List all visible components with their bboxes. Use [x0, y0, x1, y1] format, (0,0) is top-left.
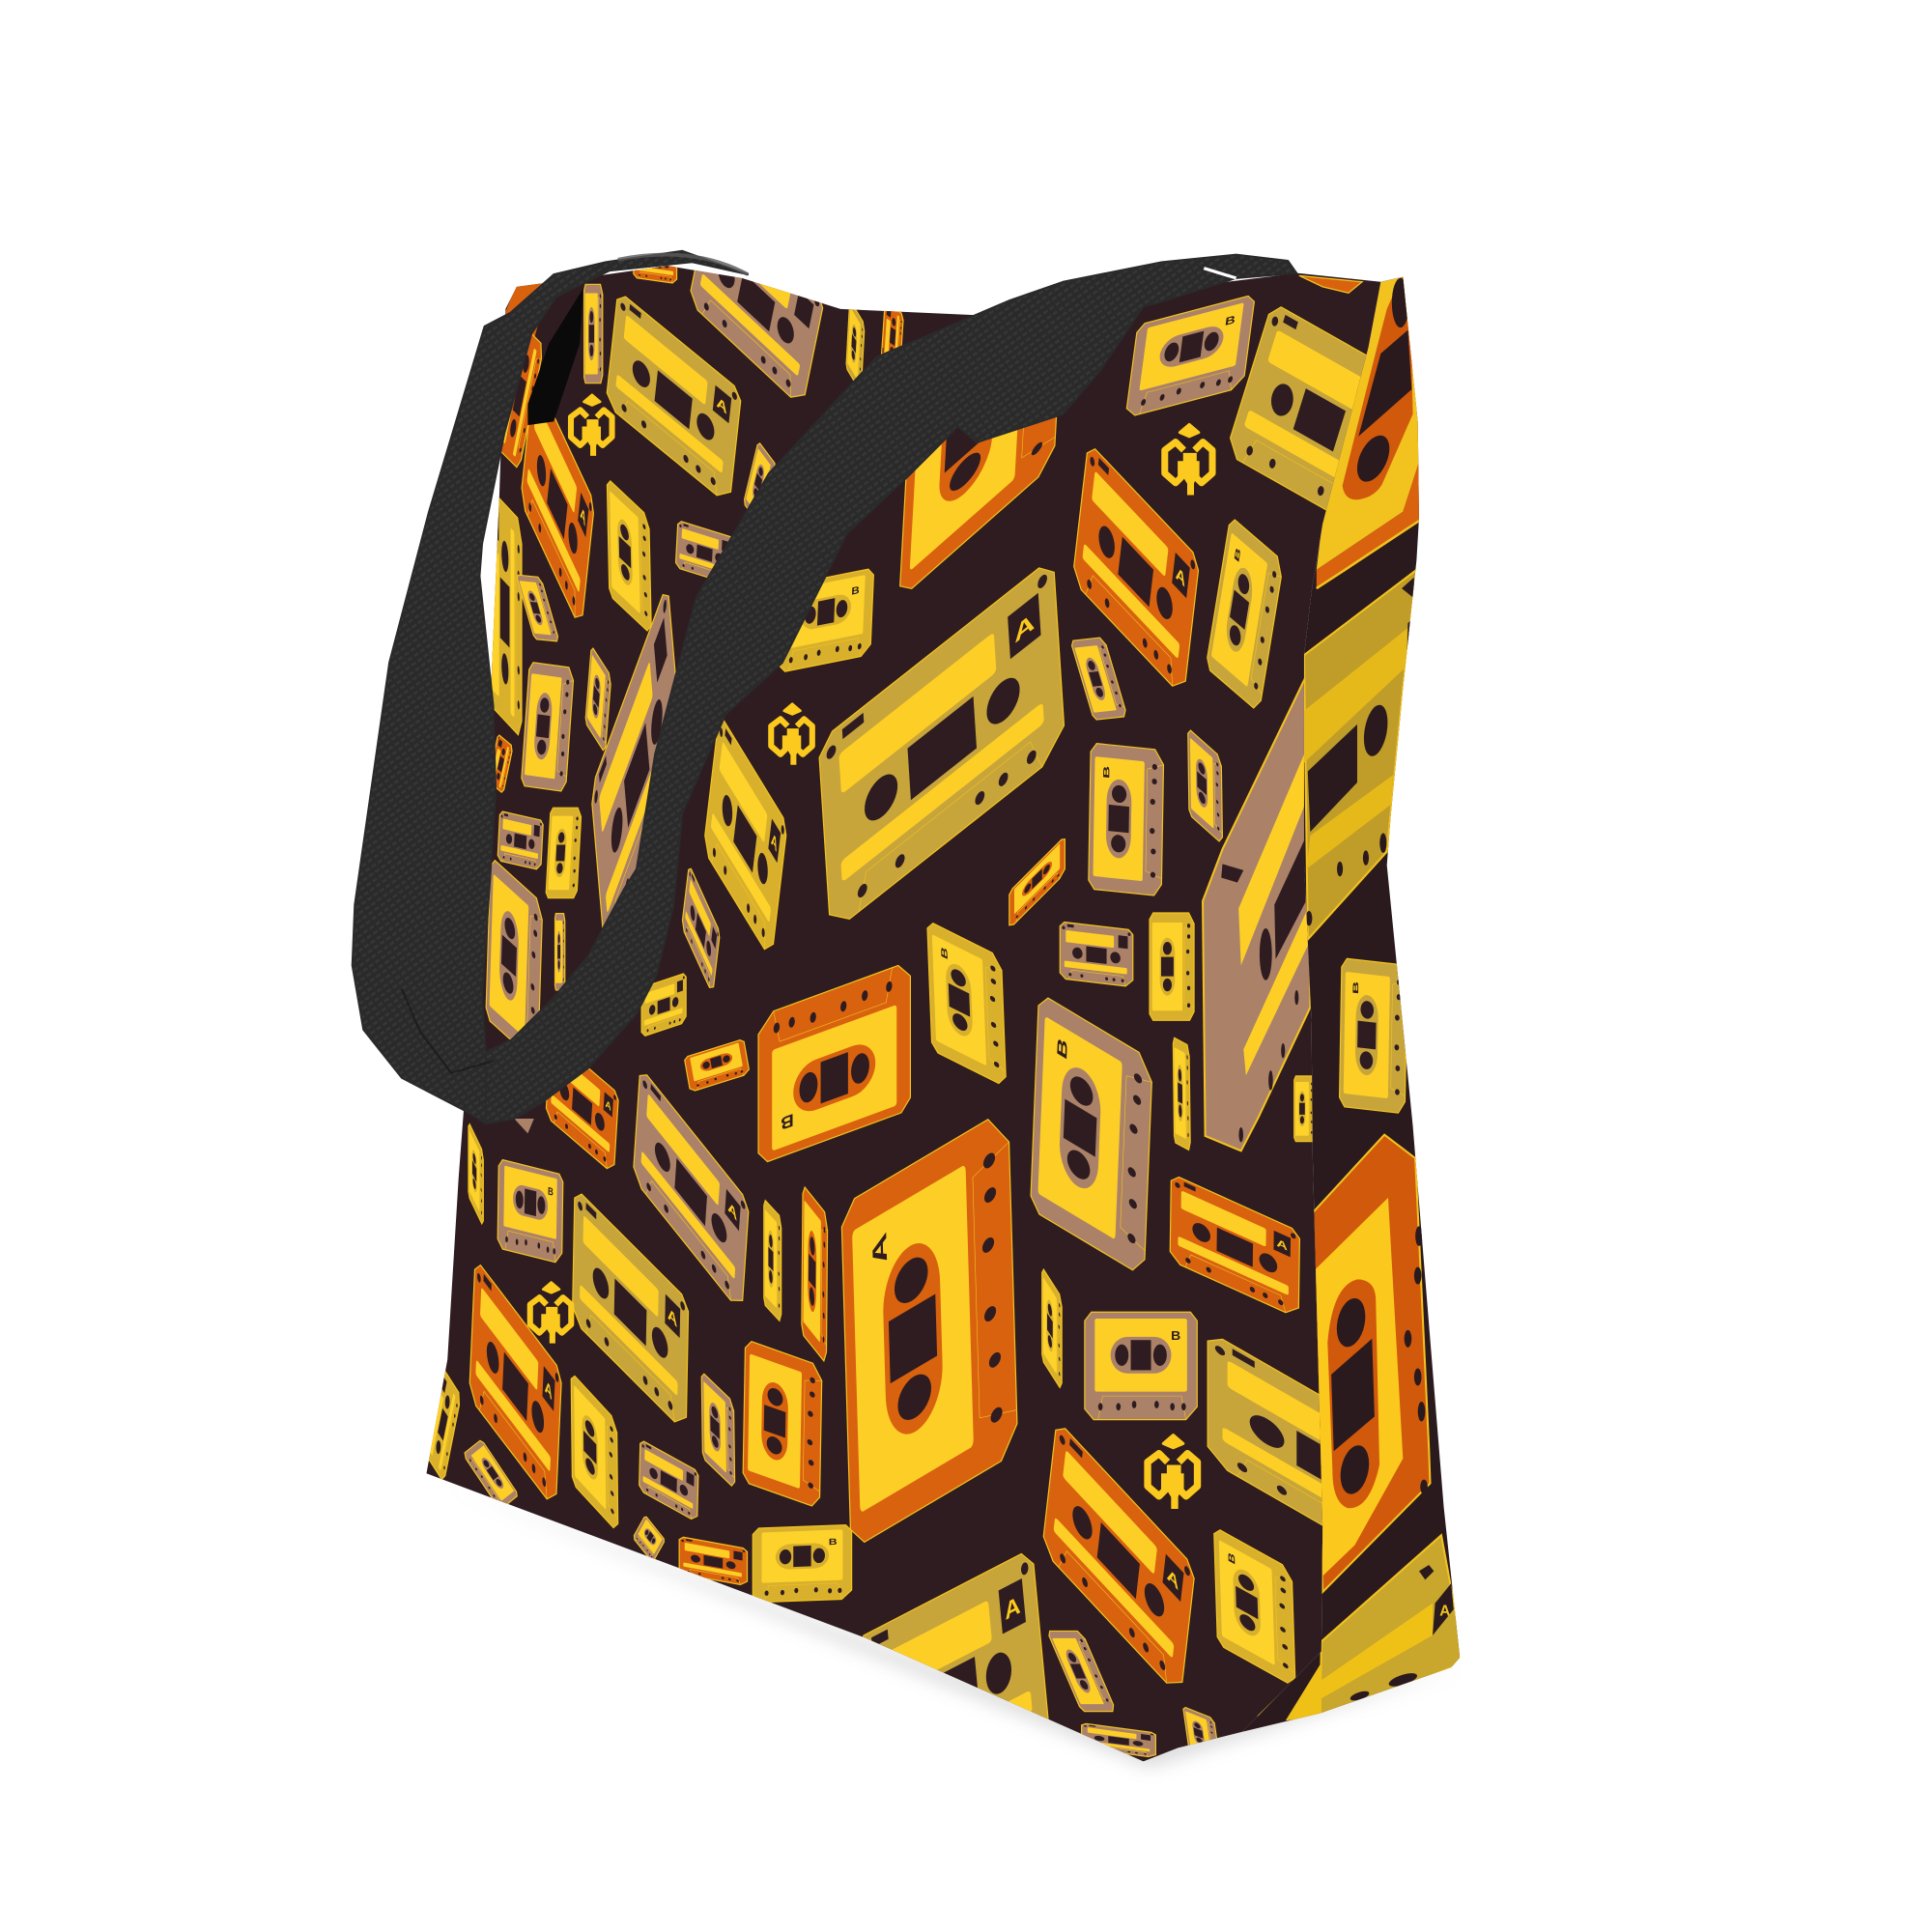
- cassette: tan narrow centre: [682, 865, 720, 994]
- cassette: large orange centre: [841, 1108, 1018, 1550]
- cassette: orange lower right: A: [1166, 1565, 1179, 1595]
- panel: side gusset of bag: [1236, 266, 1477, 1749]
- gusset cassette: small yellow B: [1339, 958, 1407, 1114]
- tote bag: [427, 266, 1461, 1762]
- cassette: small clipped at seam: [1294, 1076, 1314, 1142]
- cassette: large gold: A: [1013, 607, 1036, 649]
- cassette: orange upper right: [1072, 441, 1200, 697]
- cassette: orange tiny: [684, 1038, 750, 1093]
- cassette: tan diagonal: A: [727, 1198, 738, 1224]
- cassette: orange corner: [501, 334, 543, 469]
- cassette: yellow upright lower right: [1214, 1526, 1295, 1688]
- cassette: gold slim right: [1042, 1267, 1062, 1391]
- cassette: tan tiny: [463, 1439, 519, 1510]
- cassette: yellow tiny: [641, 973, 686, 1037]
- cassette: yellow under strap: A: [770, 828, 779, 856]
- cassette: tan-pill cassette partly under strap: [485, 860, 543, 1039]
- cassette: tan tiny bottom: [1183, 1706, 1220, 1762]
- cassette: gold slim: [764, 1199, 781, 1322]
- cassette: tan diagonal: [633, 1066, 749, 1314]
- cassette: tan landscape right: [1085, 1312, 1197, 1420]
- cassette: tan landscape top right: [1125, 295, 1255, 418]
- gusset cassette: top orange and yellow: [1317, 277, 1422, 588]
- cassette: tan narrow left: [516, 575, 559, 641]
- cassette: orange under strap bend: [545, 1068, 619, 1169]
- cassette: tan top narrow: [584, 284, 603, 384]
- cassette: orange small bottom: [679, 1537, 748, 1586]
- cassette: gold clipped bottom: A: [1004, 1591, 1021, 1626]
- cassette: tan narrow right: [1188, 728, 1223, 844]
- cassette: tan upright: [521, 662, 574, 792]
- cassette: gold narrow top: [846, 309, 866, 381]
- cassette: tan slim: [1173, 1037, 1190, 1151]
- white gap under strap: [1204, 269, 1236, 278]
- cassette: narrow: [555, 914, 565, 990]
- cassette: yellow landscape bottom: [753, 1524, 852, 1603]
- strap interior shadow: [527, 288, 583, 425]
- cassette: yellow landscape B: [778, 568, 874, 673]
- strap dark fold line: [402, 989, 495, 1073]
- cassette: yellow vertical: [607, 478, 651, 635]
- cassette: orange upright: [743, 1339, 822, 1509]
- cassette: yellow upright small: [1150, 913, 1194, 1020]
- cassette: orange lower right: [1042, 1420, 1195, 1698]
- cassette: gold top right: [1230, 306, 1366, 510]
- panel: front of bag: [427, 266, 1381, 1762]
- cassette: orange small behind strap: [495, 734, 513, 793]
- cassette: yellow upright B: [927, 921, 1007, 1087]
- cassette: orange lower left: A: [545, 1376, 554, 1405]
- cassette: tan narrow: [744, 442, 776, 509]
- gusset cassette: small yellow B: B: [1351, 980, 1361, 995]
- cassette: yellow small: [546, 808, 582, 898]
- cassette: tan top: [690, 270, 823, 398]
- strap: left shoulder loop and bend: [353, 251, 748, 1123]
- cassette: tan B lower left: [497, 1159, 563, 1264]
- cassette: gold upright: [1206, 516, 1284, 713]
- cassette: yellow landscape bottom: B: [829, 1537, 838, 1548]
- cassette: tan B lower left: B: [548, 1185, 554, 1199]
- cassette: tan upright: [1089, 743, 1164, 896]
- cassette: tan large upright: [1031, 993, 1152, 1277]
- gusset cassette: large orange: [1313, 1135, 1430, 1592]
- cassette: yellow upright lower: [571, 1372, 618, 1533]
- cassette: orange top right tab: [1299, 275, 1362, 293]
- cassette: orange under strap bend: A: [605, 1098, 611, 1114]
- cassette: tan small narrow: [1070, 638, 1127, 720]
- cassette: gold upright: B: [1234, 546, 1242, 564]
- gusset cassette: bottom yellow: [1286, 1535, 1464, 1720]
- cassette: yellow tall left: [491, 497, 523, 736]
- cassette: orange lower left: [469, 1259, 562, 1511]
- cassette: yellow under strap: [703, 713, 787, 960]
- cassette: tan large upright: B: [1054, 1035, 1070, 1063]
- cassette: yellow upright B: B: [939, 945, 950, 961]
- cassette: tan small landscape: [674, 521, 731, 578]
- cassette: tan long under strap: [591, 593, 676, 928]
- logo: [1165, 424, 1212, 495]
- cassette: tan narrow: [585, 646, 611, 753]
- strap: front diagonal handle: [486, 255, 1296, 1123]
- cassette: tan narrow bottom: [1047, 1631, 1116, 1712]
- cassette: large tan at seam: [1203, 668, 1310, 1151]
- cassette: orange landscape right: A: [1276, 1237, 1289, 1254]
- cassette: gold top left: A: [716, 393, 728, 417]
- logo: [530, 1282, 571, 1344]
- cassette: tan landscape top right: B: [1224, 313, 1236, 328]
- cassette: gold clipped at seam: [1208, 1330, 1455, 1602]
- cassette: large orange centre: A: [868, 1229, 892, 1271]
- cassette: tan upright: B: [1102, 765, 1112, 780]
- cassette: tan clipped bottom: [633, 1516, 665, 1562]
- ground shadow: [445, 1484, 1459, 1768]
- cassette: gold diagonal lower left: A: [668, 1303, 678, 1331]
- cassette: large gold: [818, 556, 1065, 934]
- logo: [771, 704, 812, 765]
- cassette: orange slim: [802, 1184, 828, 1364]
- cassette: tan small: [497, 810, 543, 870]
- cassette: gold top left: [606, 291, 742, 505]
- cassette: orange landscape inverted: B: [781, 1109, 794, 1133]
- cassette: tan clipped bottom edge: [1082, 1723, 1155, 1758]
- gusset cassette: bottom yellow: A: [1439, 1603, 1450, 1619]
- logo: [571, 395, 612, 456]
- cassette: yellow upright lower right: B: [1226, 1550, 1237, 1567]
- bottom fold tan sliver: [1259, 1655, 1321, 1719]
- cassette: orange corner top left: [505, 283, 543, 336]
- cassette: tan landscape right: B: [1171, 1329, 1180, 1343]
- cassette: orange left: [522, 417, 594, 618]
- cassette: yellow landscape B: B: [851, 584, 860, 598]
- cassette: tan tip under strap: [514, 1119, 534, 1133]
- cassette: orange left: A: [580, 502, 586, 530]
- cassette: orange landscape right: [1170, 1174, 1299, 1319]
- cassette: large orange under strap: [899, 417, 1057, 589]
- cassette: yellow clipped left: [424, 1365, 461, 1483]
- cassette: gold diagonal lower left: [572, 1187, 689, 1434]
- cassette: orange top tiny: [633, 266, 678, 284]
- gusset cassette: middle yellow: [1304, 570, 1416, 939]
- cassette: orange small diagonal: [1009, 837, 1065, 929]
- cassette: gold clipped bottom: [853, 1548, 1051, 1838]
- cassette: orange narrow top: [881, 311, 904, 355]
- cassette: tan small lower: [639, 1439, 698, 1522]
- cassette: orange upper right: A: [1175, 562, 1187, 591]
- cassette: orange landscape inverted: [758, 961, 910, 1165]
- logo: [1148, 1435, 1198, 1509]
- cassette: tan slim lower: [701, 1372, 735, 1489]
- strap highlight at top: [618, 255, 748, 274]
- cassette: tan small landscape centre: [1060, 922, 1133, 987]
- cassette: narrow left: [469, 1122, 483, 1227]
